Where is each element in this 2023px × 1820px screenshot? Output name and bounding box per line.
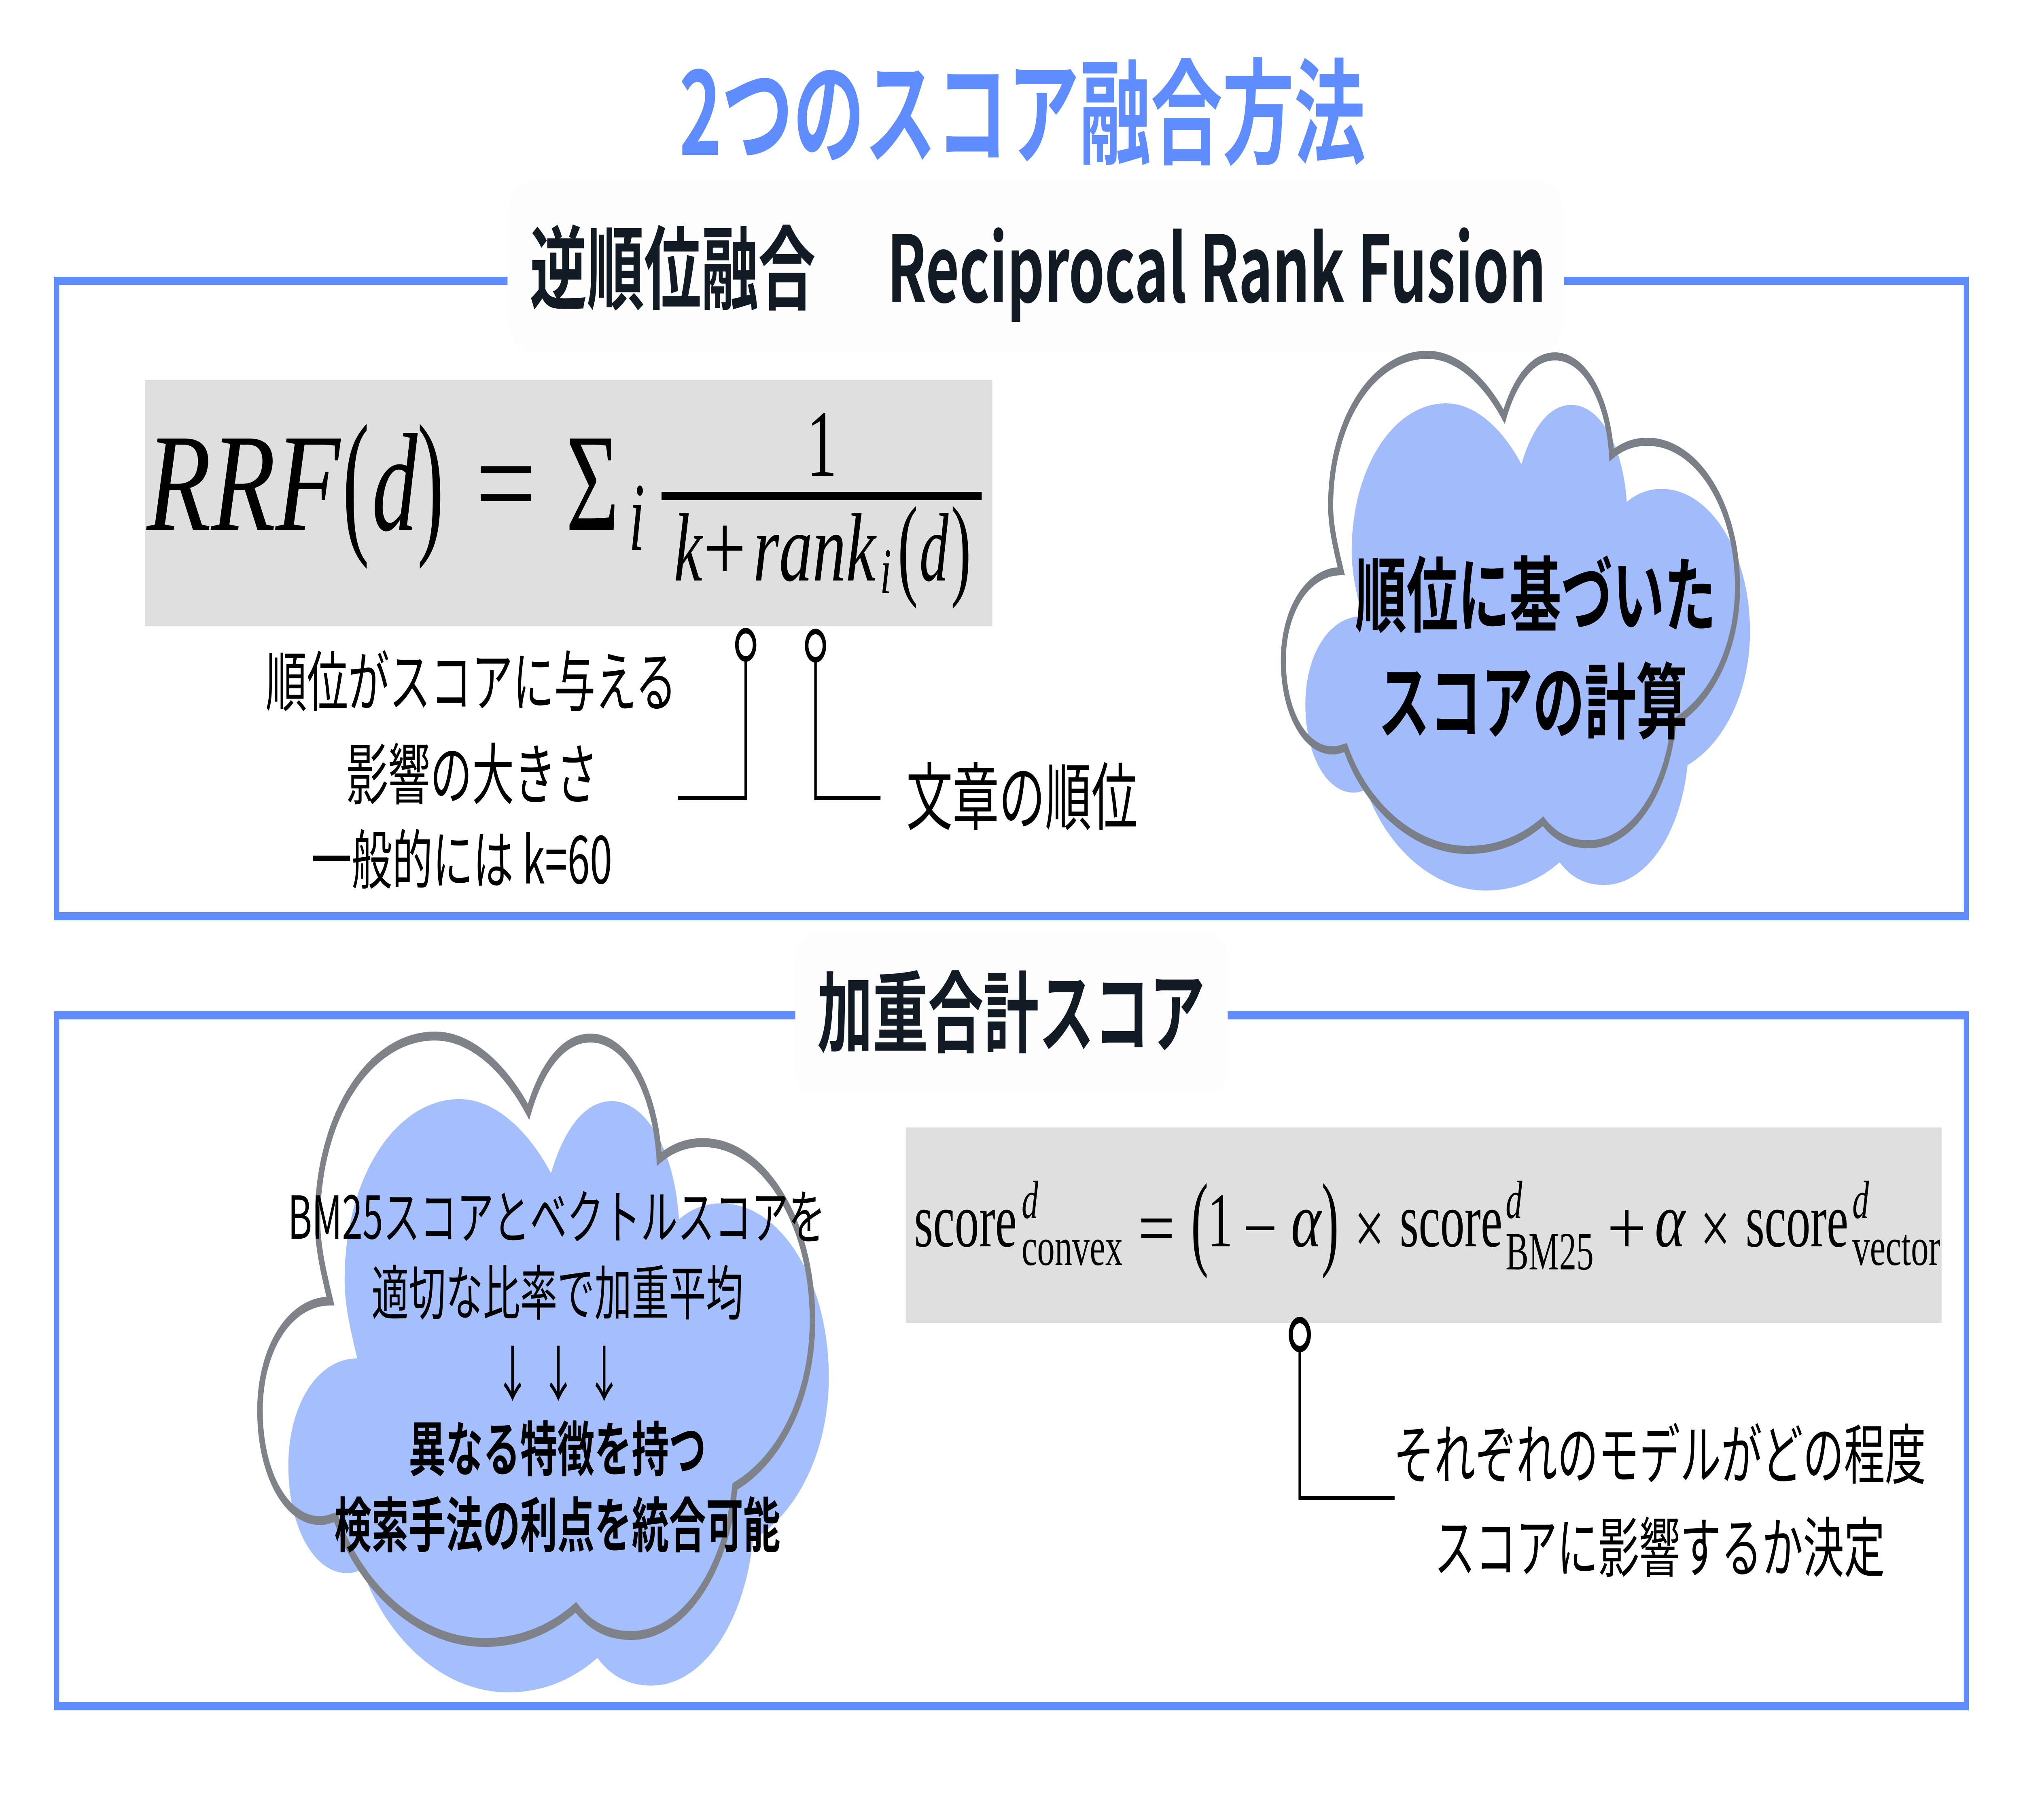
heading: reciprocal rank fusion — [507, 181, 1564, 351]
cloud: weighted combination: ↓ ↓ ↓ — [494, 1327, 623, 1413]
cloud: weighted combination: 異なる特徴を持つ — [409, 1403, 706, 1488]
formula: convex score: − — [1243, 1185, 1277, 1271]
formula: convex score: 1 — [1207, 1177, 1233, 1263]
cloud: weighted combination — [260, 1036, 829, 1692]
formula: convex score: + — [1607, 1185, 1646, 1271]
formula: RRF: ( — [343, 393, 369, 570]
formula: convex score: d — [1506, 1170, 1523, 1230]
formula: convex score: d — [1852, 1170, 1869, 1230]
callout line: rank — [807, 631, 880, 798]
formula: RRF: d — [920, 495, 949, 602]
cloud: rank based score — [1283, 355, 1750, 890]
text: k description — [266, 630, 676, 903]
text: k description: 一般的には k=60 — [311, 809, 612, 903]
title: 2つのスコア融合方法 — [679, 22, 1366, 188]
formula: convex score: ) — [1321, 1163, 1339, 1279]
text: alpha description: スコアに影響するか決定 — [1434, 1496, 1885, 1591]
formula: RRF: ) — [417, 393, 444, 570]
formula: RRF — [145, 380, 992, 626]
formula: convex score: α — [1655, 1177, 1686, 1263]
formula: RRF: + — [704, 495, 746, 602]
formula: RRF: ) — [951, 484, 971, 609]
formula: RRF: i — [880, 535, 891, 607]
formula: convex score — [906, 1127, 1942, 1323]
heading: weighted sum score: 加重合計スコア — [817, 943, 1205, 1071]
cloud: weighted combination: 適切な比率で加重平均 — [371, 1246, 743, 1332]
cloud: rank based score: スコアの計算 — [1378, 637, 1688, 756]
cloud: weighted combination: BM25スコアとベクトルスコアを — [288, 1171, 825, 1256]
panel: weighted sum score — [57, 934, 1966, 1706]
cloud: rank based score: 順位に基づいた — [1355, 530, 1716, 649]
text: document rank: 文章の順位 — [906, 738, 1138, 845]
formula: convex score: ( — [1191, 1163, 1208, 1279]
formula: convex score: score — [1745, 1177, 1848, 1263]
text: alpha description — [1393, 1403, 1926, 1591]
formula: convex score: BM25 — [1506, 1221, 1594, 1281]
formula: RRF: d — [372, 406, 419, 561]
formula: convex score: d — [1022, 1170, 1039, 1230]
formula: RRF: 1 — [807, 391, 837, 497]
formula: convex score: × — [1354, 1185, 1385, 1271]
formula: convex score: vector — [1852, 1217, 1940, 1277]
cloud: weighted combination: 検索手法の利点を統合可能 — [334, 1479, 780, 1564]
formula: convex score: score — [1400, 1177, 1502, 1263]
heading: reciprocal rank fusion: Reciprocal Rank Fusion — [887, 195, 1546, 329]
heading: reciprocal rank fusion: 逆順位融合 — [530, 197, 816, 329]
formula: RRF: rank — [753, 495, 877, 602]
formula: RRF: Σ — [566, 406, 619, 561]
formula: RRF: ( — [898, 484, 918, 609]
formula: RRF: i — [629, 464, 645, 571]
text: alpha description: それぞれのモデルがどの程度 — [1393, 1403, 1926, 1498]
formula: convex score: × — [1700, 1185, 1730, 1271]
formula: RRF: k — [674, 495, 703, 602]
text: k description: 順位がスコアに与える — [266, 630, 676, 725]
formula: convex score: convex — [1022, 1217, 1123, 1277]
panel frame — [57, 1015, 1966, 1706]
callout line: k — [678, 631, 755, 798]
panel: reciprocal rank fusion — [57, 181, 1966, 916]
formula: convex score: score — [914, 1177, 1017, 1263]
panel frame — [57, 281, 1966, 916]
formula: convex score: α — [1291, 1177, 1322, 1263]
callout line: alpha — [1291, 1320, 1395, 1498]
formula: RRF: RRF — [145, 406, 341, 561]
formula: convex score: = — [1138, 1185, 1175, 1271]
formula: RRF: = — [475, 406, 536, 561]
text: k description: 影響の大きさ — [346, 721, 598, 818]
